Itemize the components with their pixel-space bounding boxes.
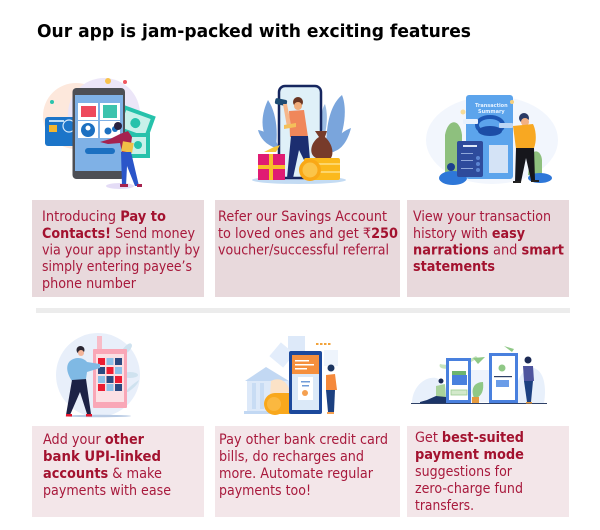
panel: zero-charge fund transfers: suggestions for <box>415 464 512 480</box>
panel: credit card bills: bills, do recharges and <box>219 449 364 465</box>
panel: other bank UPI accounts: Add your other <box>43 432 145 448</box>
panel: zero-charge fund transfers: payment mode <box>415 447 524 463</box>
panel: pay to contacts: phone number <box>42 276 136 292</box>
panel: pay to contacts: simply entering payee’s <box>42 259 192 275</box>
panel: other bank UPI accounts: bank UPI-linked <box>43 449 161 465</box>
panel: pay to contacts <box>32 200 204 297</box>
panel: transaction history: narrations and smart <box>413 242 564 258</box>
panel: pay to contacts: Introducing Pay to <box>42 209 166 225</box>
panel: transaction history: View your transaction <box>413 209 551 225</box>
panel: credit card bills <box>215 426 400 517</box>
panel: transaction history: statements <box>413 259 495 275</box>
icon: phone with pay online <box>43 78 156 189</box>
panel: zero-charge fund transfers <box>407 426 569 517</box>
panel: credit card bills: Pay other bank credit card <box>219 432 388 448</box>
icon: referral phone with gift and coins <box>252 86 351 184</box>
panel: credit card bills: payments too! <box>219 483 311 499</box>
panel: zero-charge fund transfers: transfers. <box>415 498 474 514</box>
panel: refer savings account <box>215 200 400 297</box>
icon: UPI linked accounts <box>56 333 140 417</box>
icon: transaction summary <box>426 95 558 185</box>
icon: transaction summary: Summary <box>478 109 505 115</box>
icon: bill payments <box>244 336 338 415</box>
panel: refer savings account: voucher/successful referral <box>218 242 389 258</box>
panel: credit card bills: more. Automate regular <box>219 466 373 482</box>
icon: transaction summary: Transaction <box>475 103 508 109</box>
panel: zero-charge fund transfers: zero-charge fund <box>415 481 523 497</box>
icon: payment mode suggestions <box>411 346 547 404</box>
panel: refer savings account: to loved ones and get ₹250 <box>218 226 398 242</box>
panel: pay to contacts: via your app instantly by <box>42 242 200 258</box>
panel: other bank UPI accounts: payments with ease <box>43 483 171 499</box>
panel: refer savings account: Refer our Savings Account <box>218 209 387 225</box>
panel: other bank UPI accounts: accounts & make <box>43 466 162 482</box>
panel: other bank UPI accounts <box>32 426 204 517</box>
panel: transaction history <box>407 200 569 297</box>
title: Our app is jam-packed with exciting features <box>37 21 471 42</box>
panel: transaction history: history with easy <box>413 226 526 242</box>
panel: pay to contacts: Contacts! Send money <box>42 226 195 242</box>
panel: zero-charge fund transfers: Get best-suited <box>415 430 524 446</box>
